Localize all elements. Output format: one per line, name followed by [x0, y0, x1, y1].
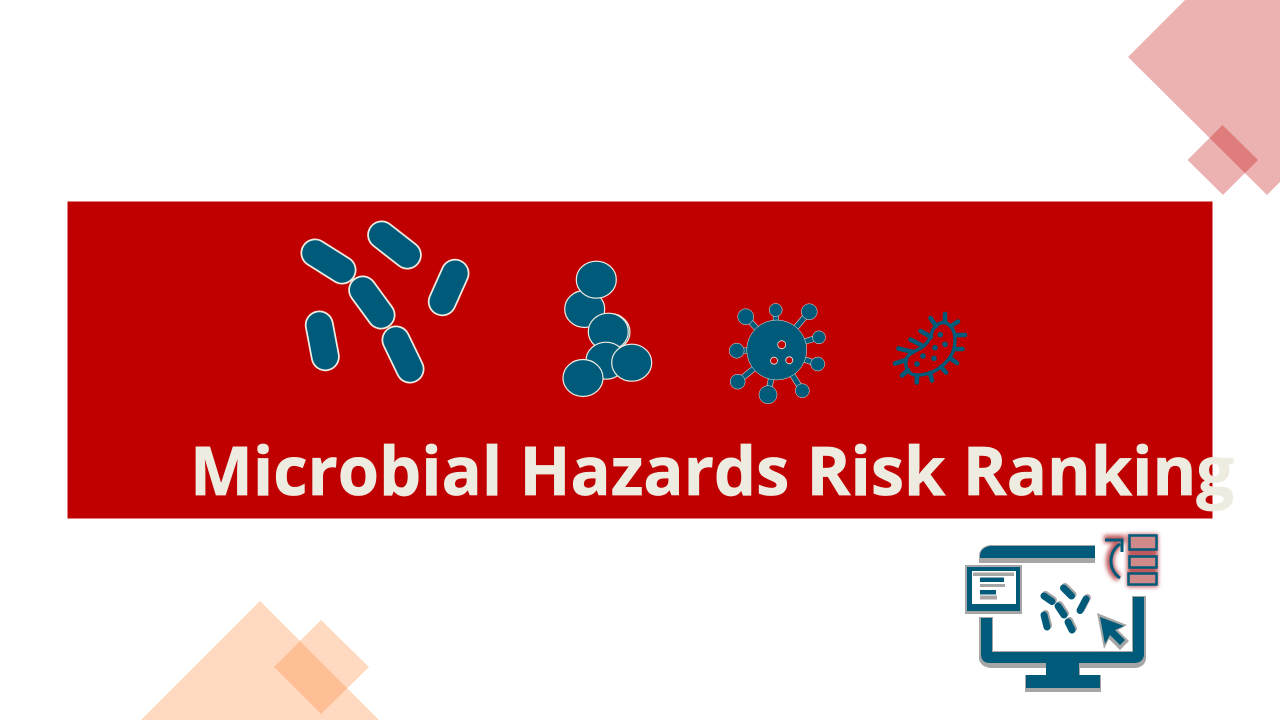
mini window — [965, 565, 1022, 614]
decorative diamonds: top right — [1128, 0, 1280, 195]
icon: rod-shaped bacteria — [315, 235, 455, 369]
monitor frame — [979, 545, 1146, 692]
icon: virus — [729, 304, 826, 404]
icon: computer screen with ranking — [965, 534, 1158, 692]
icon: cocci cluster — [563, 261, 652, 396]
title: Microbial Hazards Risk Ranking — [190, 423, 1234, 515]
icon: flagellated bacterium — [895, 314, 965, 382]
ranking list with arrow — [1104, 534, 1158, 587]
decorative diamonds: bottom left — [141, 601, 379, 720]
cursor arrow — [1097, 613, 1129, 650]
mini bacteria — [1044, 586, 1088, 630]
red title banner — [68, 202, 1212, 518]
